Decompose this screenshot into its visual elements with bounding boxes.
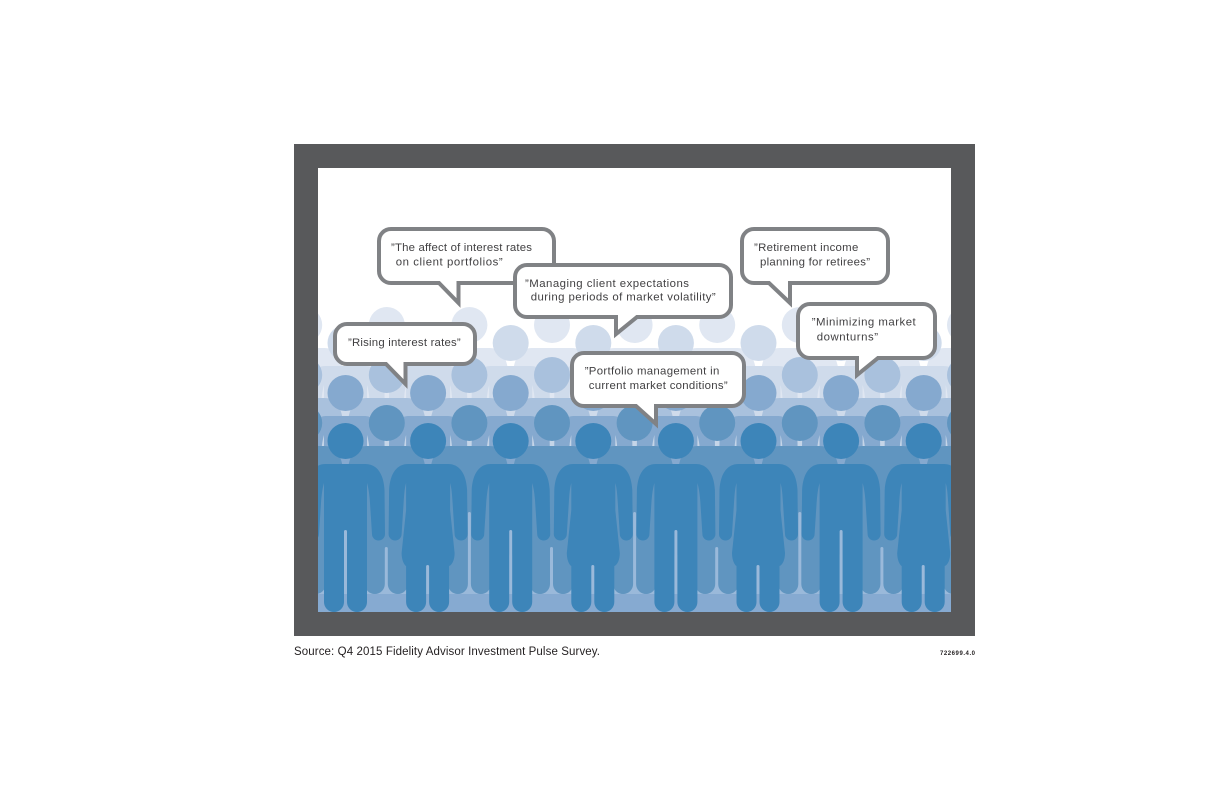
source note: Source: Q4 2015 Fidelity Advisor Investment Pulse Survey. [294, 646, 600, 658]
panel: white picture area [318, 168, 951, 612]
speech bubble: retirement income: planning for retirees” [760, 257, 870, 269]
speech bubble: client expectations: during periods of market volatility” [531, 292, 716, 304]
speech bubble: rising interest rates [335, 324, 475, 384]
speech bubble: portfolio management: current market conditions” [589, 380, 728, 392]
speech bubble: interest rates on portfolios [379, 229, 554, 303]
crowd row 1: front figures [306, 423, 963, 612]
crowd illustration [318, 307, 951, 612]
speech bubble: retirement income: ”Retirement income [754, 242, 858, 254]
middle backing strips [318, 416, 951, 594]
speech bubble: interest rates on portfolios: ”The affect of interest rates [391, 242, 532, 254]
document code: 722699.4.0 [940, 651, 976, 657]
speech bubble: retirement income [742, 229, 888, 303]
bottom strip [318, 594, 951, 612]
crowd row 5 [318, 325, 951, 416]
crowd row 3 [318, 375, 951, 464]
speech bubble: rising interest rates: ”Rising interest rates” [348, 337, 461, 349]
speech bubble: market downturns: ”Minimizing market [812, 317, 917, 329]
speech bubble: market downturns [798, 304, 935, 375]
speech bubble: interest rates on portfolios: on client portfolios” [396, 257, 503, 269]
crowd row 2 [318, 405, 951, 594]
speech bubble: portfolio management: ”Portfolio management in [585, 365, 719, 377]
speech bubble: client expectations: ”Managing client expectations [525, 278, 689, 290]
crowd row 4 [318, 357, 951, 416]
crowd row 6: palest [318, 307, 951, 398]
speech bubble: client expectations [515, 265, 731, 334]
speech bubble: portfolio management [572, 353, 744, 424]
frame [294, 144, 975, 636]
infographic [294, 144, 975, 658]
speech bubble: market downturns: downturns” [817, 332, 878, 344]
